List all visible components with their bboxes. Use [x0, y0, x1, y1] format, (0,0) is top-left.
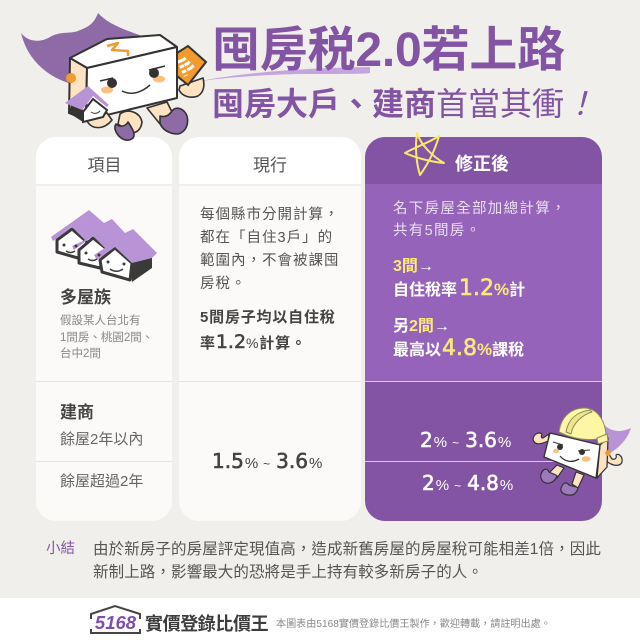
icon: legs and boots [115, 102, 188, 140]
developer: over 2 years: 餘屋超過2年 [60, 473, 143, 490]
icon: yellow hard hat [559, 408, 608, 444]
current rule text: 都在「自住3戶」的 [200, 230, 333, 246]
current column header: 現行 [253, 156, 287, 175]
amended rule text [393, 200, 567, 239]
amended developer rate over 2 years: 2% ~ 4.8% [422, 471, 513, 495]
panel: item column [36, 137, 172, 521]
logo: 5168 house [90, 605, 141, 634]
multi-home owner description: 台中2間 [60, 348, 101, 360]
current rule emphasis [200, 309, 336, 353]
icon: house body [66, 35, 177, 120]
summary label: 小結 [46, 541, 75, 557]
multi-home owner label: 多屋族 [60, 288, 111, 307]
logo wordmark: 實價登錄比價王 [145, 614, 268, 634]
developer: within 2 years: 餘屋2年以內 [60, 431, 143, 448]
icon: house face [544, 433, 611, 478]
main title: 囤房税2.0若上路 [212, 24, 565, 77]
current rule text: 範圍內，不會被課囤 [200, 253, 340, 269]
summary text [93, 540, 601, 580]
summary text: 新制上路，影響最大的恐將是手上持有較多新房子的人。 [93, 564, 483, 580]
amended: other 2 homes rate: 另2間→ [393, 318, 450, 335]
credit line: 本圖表由5168實價登錄比價王製作，歡迎轉載，請註明出處。 [276, 619, 551, 630]
amended: 3 homes rate: 自住稅率1.2%計 [393, 276, 525, 301]
subtitle: 囤房大戶、建商首當其衝！ [212, 86, 596, 122]
main title underline [204, 67, 370, 81]
panel: amended column [365, 137, 602, 521]
amended rule text: 名下房屋全部加總計算， [393, 201, 567, 217]
amended: 3 homes rate [393, 258, 525, 301]
mascot: flying house with cape [21, 13, 208, 141]
current rule text: 每個縣市分開計算， [200, 207, 340, 223]
amended: other 2 homes rate [393, 318, 524, 361]
multi-home owner description: 1間房、桃園2間、 [60, 332, 153, 344]
icon: arms and legs [533, 433, 622, 495]
current developer rate: 1.5% ~ 3.6% [212, 449, 322, 473]
footer band [0, 598, 640, 640]
icon: calculator and hand [177, 46, 206, 97]
mascot: house with hard hat [532, 408, 631, 496]
item column header [36, 137, 173, 186]
current rule text [200, 206, 340, 292]
amended: other 2 homes rate: 最高以4.8%課稅 [393, 336, 524, 361]
current rule text: 房稅。 [200, 276, 246, 292]
logo: 5168 house: 5168 [95, 612, 137, 633]
icon: small cape [604, 425, 631, 454]
current rule emphasis: 5間房子均以自住稅 [200, 309, 336, 326]
icon: cape [21, 13, 142, 84]
summary text: 由於新房子的房屋評定現值高，造成新舊房屋的房屋稅可能相差1倍，因此 [93, 541, 601, 558]
developer label: 建商 [60, 403, 94, 422]
amended developer rate within 2 years: 2% ~ 3.6% [420, 428, 511, 452]
amended: 3 homes rate: 3間→ [393, 258, 434, 275]
amended column heading: 修正後 [455, 154, 509, 174]
icon: small purple-roofed house [65, 86, 112, 128]
current column header [179, 137, 361, 186]
multi-home owner description [60, 314, 153, 360]
icon: hand-drawn star [404, 132, 445, 176]
item column header: 項目 [88, 156, 122, 175]
panel: current column [179, 137, 361, 521]
multi-home owner description: 假設某人台北有 [60, 315, 140, 327]
icon: three houses [51, 210, 157, 282]
amended column middle band [365, 184, 602, 381]
amended rule text: 共有5間房。 [393, 223, 481, 239]
current rule emphasis: 率1.2%計算。 [200, 331, 307, 353]
